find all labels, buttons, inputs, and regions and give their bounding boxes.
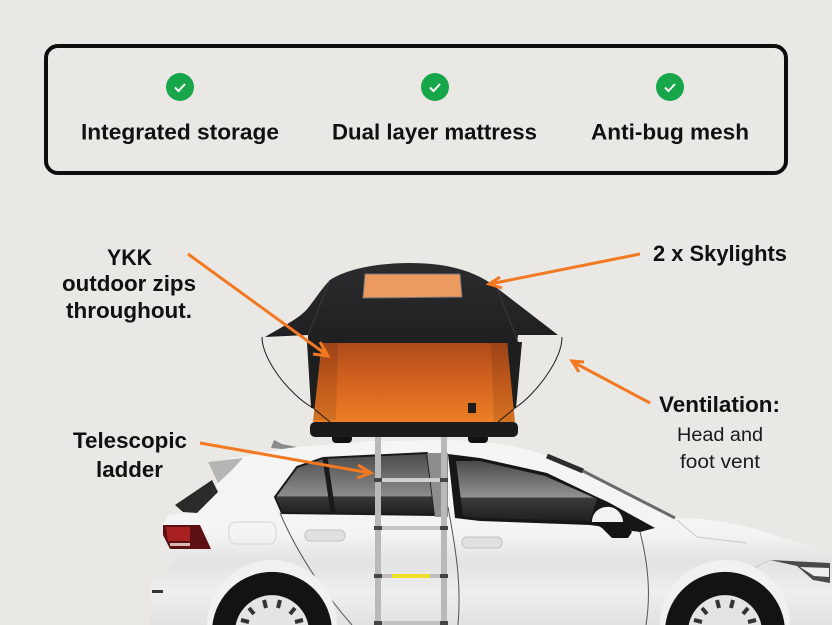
- rear glass: [175, 480, 218, 513]
- feature: integrated storage: [81, 73, 279, 144]
- telescopic ladder: [374, 436, 448, 625]
- car illustration: [150, 440, 832, 625]
- label: ladder: Telescopic: [73, 428, 187, 453]
- guy lines: [262, 337, 562, 422]
- hood crease: [677, 520, 770, 570]
- label: YKK zips: outdoor zips: [62, 271, 196, 296]
- door seams: [280, 507, 648, 625]
- rear wheel: [207, 560, 337, 625]
- feature: anti-bug mesh: Anti-bug mesh: [591, 120, 749, 144]
- headlight: [770, 560, 830, 583]
- front window frame: [448, 454, 655, 532]
- arrow: YKK zips: [188, 254, 328, 356]
- tent label: [468, 403, 476, 413]
- arrow: ventilation: [572, 361, 650, 403]
- tent body: [313, 342, 515, 422]
- label: ladder: [73, 428, 187, 482]
- label: YKK zips: throughout.: [66, 298, 192, 323]
- tent side shading: [313, 342, 515, 422]
- label: ventilation: [659, 392, 780, 473]
- label: skylights: 2 x Skylights: [653, 241, 787, 266]
- label: ladder: ladder: [96, 457, 163, 482]
- b pillar: [427, 453, 448, 517]
- feature: dual layer mattress: [332, 73, 537, 144]
- rear side window: [275, 453, 435, 515]
- car body: [150, 440, 832, 625]
- side flaps: [307, 342, 522, 408]
- label: YKK zips: [62, 245, 196, 323]
- feature: anti-bug mesh: [591, 73, 749, 144]
- side mirror: [592, 507, 632, 538]
- antenna: [271, 440, 297, 449]
- tent roof: [265, 263, 558, 343]
- label: ventilation: foot vent: [680, 452, 761, 473]
- label: ventilation: Head and: [677, 425, 763, 446]
- windshield strip: [547, 456, 583, 471]
- tail light: [163, 525, 211, 549]
- roof fold: [308, 280, 518, 342]
- label: ventilation: Ventilation:: [659, 392, 780, 417]
- fuel flap: [229, 522, 276, 544]
- arrow: skylights: [489, 254, 640, 288]
- feature: dual layer mattress: Dual layer mattress: [332, 120, 537, 144]
- front window glass: [456, 461, 597, 521]
- ladder collars: [374, 478, 448, 625]
- rear reflector: [152, 590, 163, 593]
- skylight: [363, 274, 462, 298]
- door handles: [305, 530, 345, 541]
- tent base: [310, 422, 518, 437]
- rooftop tent: [262, 263, 562, 443]
- spoiler shade: [208, 458, 243, 483]
- panel: features: [46, 46, 786, 173]
- feature: integrated storage: Integrated storage: [81, 120, 279, 144]
- tent feet: [332, 434, 352, 443]
- arrow: ladder: [200, 443, 371, 478]
- label: YKK zips: YKK: [107, 245, 152, 270]
- front wheel: [660, 560, 790, 625]
